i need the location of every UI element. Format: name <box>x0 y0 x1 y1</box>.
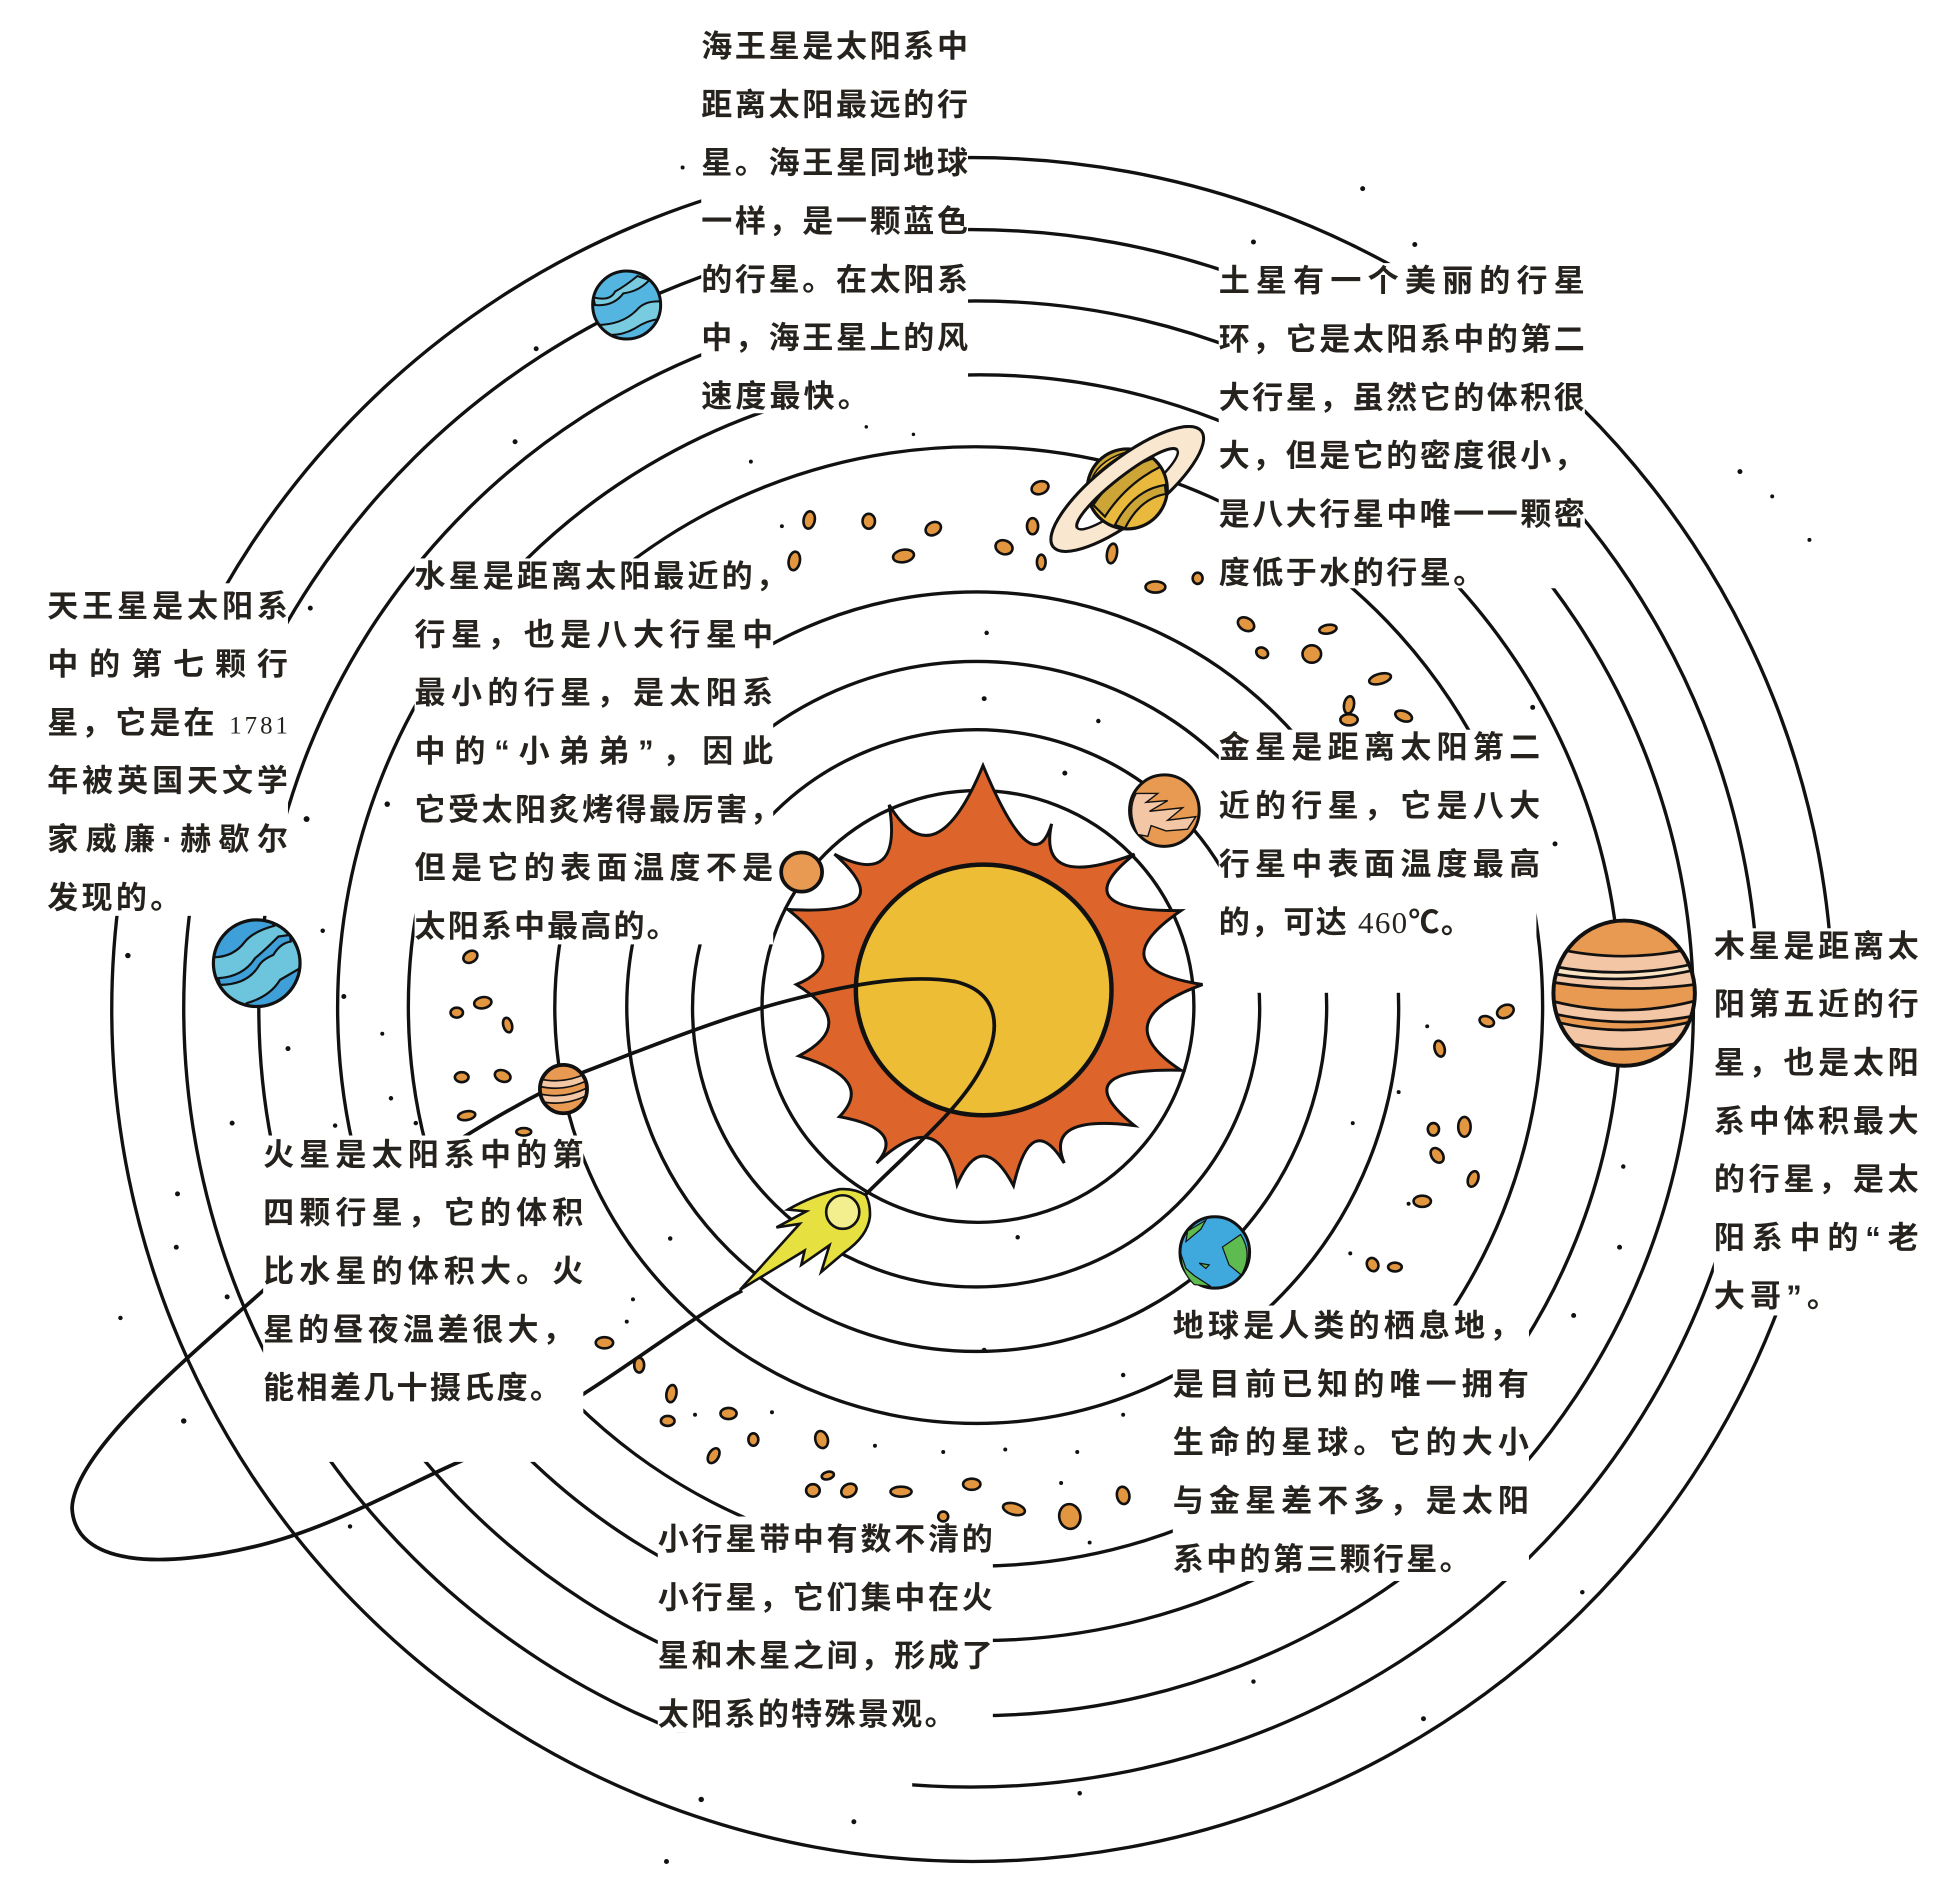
text: Uranus: 星，它是在 1781 <box>47 705 288 740</box>
text: Neptune: 星。海王星同地球 <box>701 146 968 181</box>
text: Saturn: 环，它是太阳系中的第二 <box>1219 322 1585 357</box>
sun rays <box>788 766 1203 1186</box>
text: Uranus: 中的第七颗行 <box>47 647 288 682</box>
text: Mars: 四颗行星，它的体积 <box>263 1196 583 1231</box>
text: Jupiter: 阳第五近的行 <box>1714 987 1919 1022</box>
asteroid belt rocks <box>451 479 1516 1531</box>
text: Venus: 金星是距离太阳第二 <box>1219 730 1540 765</box>
text: Uranus: 发现的。 <box>47 880 181 915</box>
text: Jupiter: 大哥”。 <box>1714 1279 1838 1314</box>
text: Neptune: 海王星是太阳系中 <box>701 29 968 64</box>
text: Mercury: 中的“小弟弟”，因此 <box>415 734 773 769</box>
text: Earth: 系中的第三颗行星。 <box>1173 1542 1471 1577</box>
text: Neptune <box>701 29 968 414</box>
text: Mercury: 行星，也是八大行星中 <box>415 617 773 652</box>
text: Mercury <box>415 559 787 944</box>
text: Earth: 生命的星球。它的大小 <box>1173 1425 1529 1460</box>
text: Neptune: 一样，是一颗蓝色 <box>701 204 968 239</box>
text: Uranus: 年被英国天文学 <box>47 764 288 799</box>
text: asteroid belt: 太阳系的特殊景观。 <box>658 1697 956 1732</box>
text: Saturn <box>1219 264 1585 590</box>
text: Mercury: 最小的行星，是太阳系 <box>415 676 773 711</box>
text: asteroid belt <box>658 1522 993 1732</box>
comet orbit path <box>72 979 994 1560</box>
text: Saturn: 是八大行星中唯一一颗密 <box>1219 497 1585 532</box>
text: Jupiter: 系中体积最大 <box>1714 1104 1919 1139</box>
sun disc <box>856 865 1111 1115</box>
specks <box>118 166 1811 1864</box>
planet: Jupiter <box>1549 921 1698 1066</box>
text: Neptune: 中，海王星上的风 <box>701 321 968 356</box>
text: Uranus: 天王星是太阳系 <box>47 589 288 624</box>
text: Earth: 地球是人类的栖息地， <box>1173 1309 1520 1344</box>
text: Uranus: 家威廉·赫歇尔 <box>47 822 288 857</box>
planet: Mercury <box>781 852 822 892</box>
text: asteroid belt: 星和木星之间，形成了 <box>658 1639 993 1674</box>
text: Neptune: 距离太阳最远的行 <box>701 87 968 122</box>
planet: Earth <box>1180 1217 1250 1288</box>
text: Neptune: 速度最快。 <box>701 379 869 414</box>
text: Jupiter: 木星是距离太 <box>1714 929 1919 964</box>
planet: Uranus <box>212 918 302 1008</box>
text: Saturn: 大，但是它的密度很小， <box>1219 439 1585 474</box>
text: Venus: 行星中表面温度最高 <box>1219 847 1540 882</box>
text: Uranus <box>47 589 288 915</box>
text: Saturn: 土星有一个美丽的行星 <box>1219 264 1585 299</box>
planet: Saturn <box>1049 425 1206 553</box>
text: Earth: 与金星差不多，是太阳 <box>1173 1484 1529 1519</box>
text: Venus: 近的行星，它是八大 <box>1219 789 1540 824</box>
planet: Mars <box>534 1065 593 1113</box>
text: Mars: 星的昼夜温差很大， <box>263 1312 573 1347</box>
text: Venus: 的，可达 460℃。 <box>1219 905 1472 940</box>
text: Earth <box>1173 1309 1529 1577</box>
text: Mercury: 水星是距离太阳最近的， <box>415 559 787 594</box>
text: Jupiter: 阳系中的“老 <box>1714 1220 1919 1255</box>
text: Saturn: 大行星，虽然它的体积很 <box>1219 380 1585 415</box>
text: asteroid belt: 小行星带中有数不清的 <box>658 1522 993 1557</box>
text: Mars <box>263 1137 583 1406</box>
text: Mars: 能相差几十摄氏度。 <box>263 1371 561 1406</box>
planet: Venus <box>1130 775 1199 846</box>
text: Venus <box>1219 730 1540 940</box>
text: Mercury: 它受太阳炙烤得最厉害， <box>415 792 781 827</box>
text: Mars: 比水星的体积大。火 <box>263 1254 583 1289</box>
planet: Neptune <box>593 271 663 339</box>
orbit lines <box>112 158 1833 1861</box>
text: Mars: 火星是太阳系中的第 <box>263 1137 583 1172</box>
text: Jupiter: 星，也是太阳 <box>1714 1045 1919 1080</box>
text: Jupiter <box>1714 929 1919 1314</box>
text: Mercury: 太阳系中最高的。 <box>415 909 678 944</box>
comet <box>740 1189 870 1290</box>
text: Earth: 是目前已知的唯一拥有 <box>1173 1367 1529 1402</box>
text: Neptune: 的行星。在太阳系 <box>701 262 968 297</box>
sun <box>788 766 1203 1186</box>
text: Mercury: 但是它的表面温度不是 <box>415 851 773 886</box>
text: Saturn: 度低于水的行星。 <box>1219 555 1484 590</box>
text: asteroid belt: 小行星，它们集中在火 <box>658 1580 993 1615</box>
text: Jupiter: 的行星，是太 <box>1714 1162 1919 1197</box>
